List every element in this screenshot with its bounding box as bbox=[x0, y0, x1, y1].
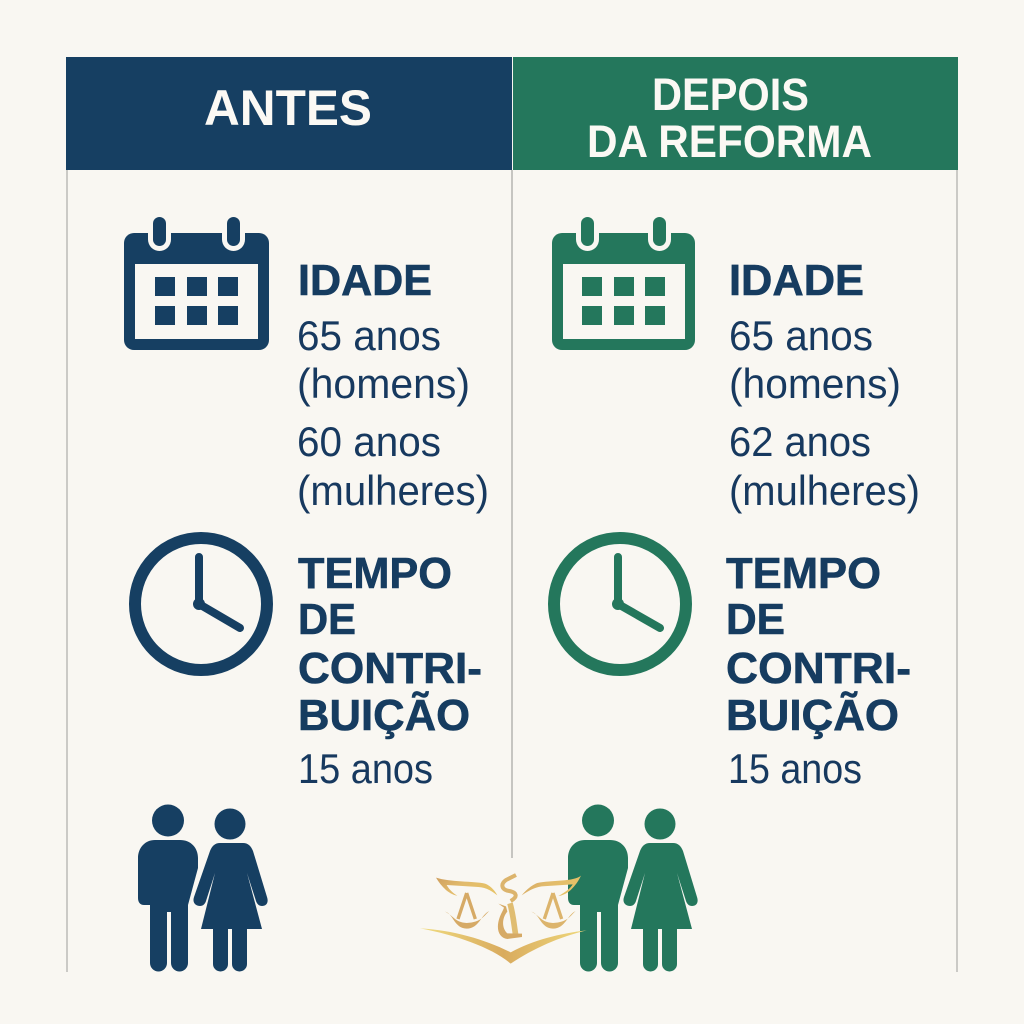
text: idade depois bbox=[729, 256, 920, 514]
text: idade antes: IDADE bbox=[298, 256, 432, 305]
icon: clock bbox=[554, 538, 686, 670]
logo: golden scales bbox=[420, 875, 587, 964]
text: idade antes: (mulheres) bbox=[297, 467, 489, 514]
text: idade depois: 62 anos bbox=[729, 418, 871, 465]
panel: DEPOIS DA REFORMA column bbox=[513, 57, 958, 972]
text: idade depois: IDADE bbox=[729, 256, 864, 305]
icon: man and woman bbox=[138, 804, 268, 972]
icon: calendar bbox=[552, 217, 695, 350]
text: tempo de contribuição depois bbox=[726, 549, 911, 792]
text: idade antes: 60 anos bbox=[297, 418, 441, 465]
header: ANTES: ANTES bbox=[204, 80, 372, 136]
icon: calendar bbox=[124, 217, 269, 350]
text: tempo de contribuição depois: TEMPO bbox=[726, 549, 881, 598]
text: tempo de contribuição depois: CONTRI- bbox=[726, 644, 911, 693]
text: tempo de contribuição antes: DE bbox=[298, 595, 356, 644]
text: idade antes: (homens) bbox=[297, 360, 470, 407]
text: tempo de contribuição antes bbox=[298, 549, 482, 792]
header: DEPOIS DA REFORMA bbox=[513, 57, 958, 170]
text: tempo de contribuição depois: 15 anos bbox=[728, 745, 862, 792]
icon: clock bbox=[135, 538, 267, 670]
text: tempo de contribuição depois: BUIÇÃO bbox=[726, 690, 899, 740]
icon: man and woman bbox=[568, 804, 698, 972]
text: tempo de contribuição antes: BUIÇÃO bbox=[298, 690, 470, 740]
text: tempo de contribuição antes: 15 anos bbox=[298, 745, 433, 792]
text: idade depois: (homens) bbox=[729, 360, 901, 407]
text: tempo de contribuição antes: CONTRI- bbox=[298, 644, 482, 693]
text: tempo de contribuição antes: TEMPO bbox=[298, 549, 452, 598]
text: tempo de contribuição depois: DE bbox=[726, 595, 785, 644]
text: idade antes bbox=[297, 256, 489, 514]
header: DEPOIS DA REFORMA: DEPOIS bbox=[652, 69, 809, 120]
panel: ANTES column bbox=[66, 57, 512, 972]
header: ANTES bbox=[66, 57, 512, 170]
text: idade depois: (mulheres) bbox=[729, 467, 920, 514]
header: DEPOIS DA REFORMA: DA REFORMA bbox=[587, 116, 872, 167]
text: idade antes: 65 anos bbox=[297, 312, 441, 359]
text: idade depois: 65 anos bbox=[729, 312, 873, 359]
